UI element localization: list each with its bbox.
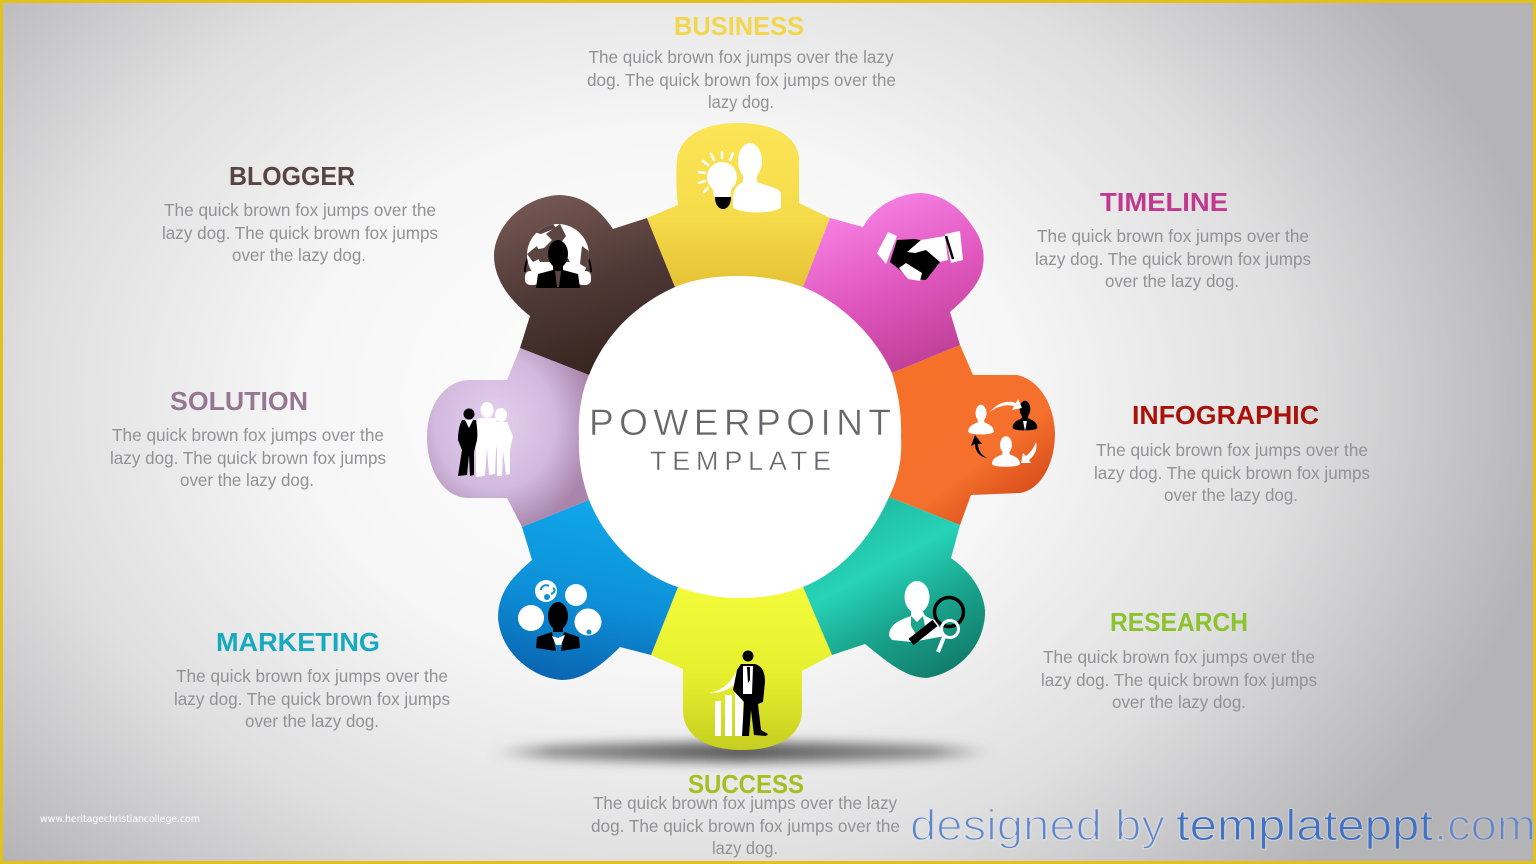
label: business: lazy dog.: [708, 92, 774, 112]
segment: timeline (pink): [803, 193, 984, 373]
label: infographic: lazy dog. The quick brown fox jumps: [1094, 463, 1370, 483]
icon: team with speech bubbles: [518, 580, 602, 651]
label: business: dog. The quick brown fox jumps over the: [587, 70, 896, 90]
label: solution: The quick brown fox jumps over the: [112, 425, 384, 445]
label: marketing: MARKETING: [216, 627, 380, 657]
designed by credit: templateppt: [1176, 801, 1433, 850]
label: success: SUCCESS: [688, 769, 804, 799]
label: solution: over the lazy dog.: [180, 470, 314, 490]
segment: blogger (brown): [494, 195, 675, 375]
label: marketing: over the lazy dog.: [245, 711, 379, 731]
center title: POWERPOINT: [589, 402, 891, 443]
label: business: BUSINESS: [674, 11, 804, 41]
label: infographic: [1094, 400, 1370, 505]
segment: marketing (blue): [498, 500, 678, 680]
designed by credit: [910, 801, 1536, 850]
designed by credit: .com: [1434, 801, 1536, 850]
label: solution: SOLUTION: [170, 386, 308, 416]
label: blogger: The quick brown fox jumps over the: [164, 200, 436, 220]
icon: person with magnifier: [889, 581, 964, 652]
label: solution: lazy dog. The quick brown fox jumps: [110, 448, 386, 468]
label: infographic: over the lazy dog.: [1164, 485, 1298, 505]
label: marketing: lazy dog. The quick brown fox jumps: [174, 689, 450, 709]
icon: businessman with bar chart: [709, 650, 768, 736]
icon: people cycle: [968, 399, 1037, 467]
designed by credit: designed by: [910, 801, 1165, 850]
label: blogger: lazy dog. The quick brown fox jumps: [162, 223, 438, 243]
label: blogger: over the lazy dog.: [232, 245, 366, 265]
icon: globe with businessman: [520, 224, 591, 288]
label: marketing: [174, 627, 450, 731]
label: timeline: [1035, 187, 1311, 291]
label: blogger: [162, 161, 438, 265]
label: timeline: over the lazy dog.: [1105, 271, 1239, 291]
label: solution: [110, 386, 386, 490]
label: research: [1041, 607, 1317, 712]
label: business: [587, 11, 896, 112]
label: infographic: The quick brown fox jumps over the: [1096, 440, 1368, 460]
label: success: [591, 769, 900, 858]
segment: infographic (orange): [889, 345, 1055, 525]
label: timeline: lazy dog. The quick brown fox jumps: [1035, 249, 1311, 269]
label: research: over the lazy dog.: [1112, 692, 1246, 712]
icon: three people standing: [458, 402, 513, 477]
center title: TEMPLATE: [650, 446, 831, 476]
label: research: The quick brown fox jumps over the: [1043, 647, 1315, 667]
ground shadow: [490, 742, 994, 762]
label: success: lazy dog.: [712, 838, 778, 858]
center title: [589, 402, 891, 476]
label: success: dog. The quick brown fox jumps over the: [591, 816, 900, 836]
label: blogger: BLOGGER: [229, 161, 355, 191]
icon: light bulb and person: [699, 143, 781, 212]
label: timeline: TIMELINE: [1100, 187, 1228, 217]
watermark url: www.heritagechristiancollege.com: [40, 814, 200, 825]
label: research: RESEARCH: [1110, 607, 1248, 637]
label: timeline: The quick brown fox jumps over the: [1037, 226, 1309, 246]
label: infographic: INFOGRAPHIC: [1132, 400, 1319, 430]
gear ring: [427, 123, 1055, 750]
segment: research (teal): [803, 497, 985, 678]
segment: solution (lilac): [427, 348, 589, 527]
label: research: lazy dog. The quick brown fox jumps: [1041, 670, 1317, 690]
label: marketing: The quick brown fox jumps over the: [176, 666, 448, 686]
center disc: [576, 273, 904, 601]
segment: business (yellow): [647, 123, 830, 287]
label: success: The quick brown fox jumps over the lazy: [593, 793, 897, 813]
icon: handshake: [877, 231, 963, 281]
label: business: The quick brown fox jumps over the lazy: [588, 47, 894, 67]
segment: success (lime): [651, 587, 832, 750]
